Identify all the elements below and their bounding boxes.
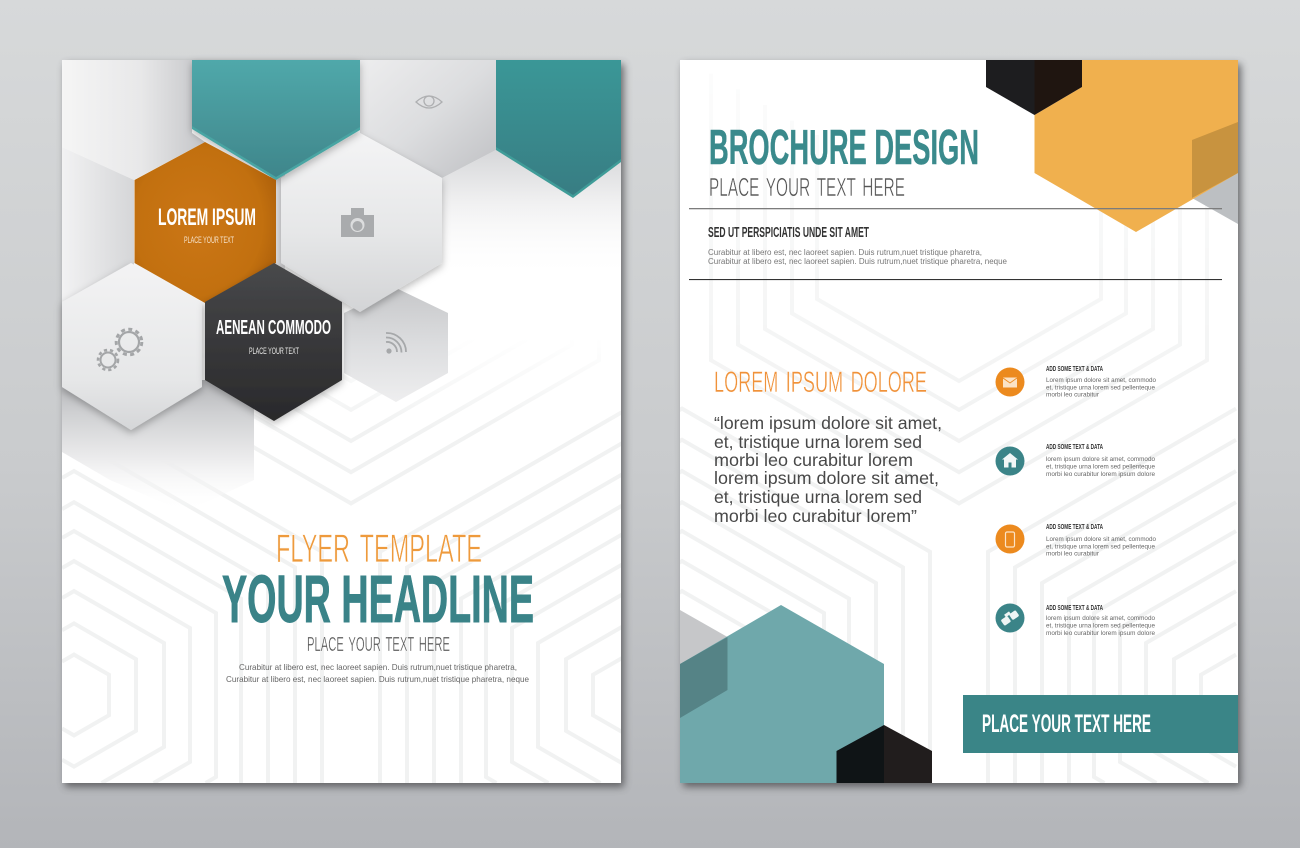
item text: et, tristique urna lorem sed pellenteque <box>1046 544 1155 550</box>
body text <box>226 662 529 684</box>
item text: morbi leo curabitur <box>1046 550 1100 558</box>
quote: “lorem ipsum dolore sit amet, <box>714 413 942 433</box>
icon: gears <box>98 329 142 370</box>
item: mail <box>996 366 1156 398</box>
hexagon: orange top <box>1034 60 1238 232</box>
hexagon: orange <box>134 142 276 303</box>
section heading: SED UT PERSPICIATIS UNDE SIT AMET <box>708 225 869 241</box>
text: place your text: PLACE YOUR TEXT <box>184 235 234 246</box>
hexagon: gears <box>62 263 202 430</box>
hexagon cluster <box>62 60 621 512</box>
heading: lorem ipsum: LOREM IPSUM <box>158 204 256 231</box>
item heading: ADD SOME TEXT & DATA <box>1046 366 1103 373</box>
flyer title: FLYER TEMPLATE <box>276 527 482 571</box>
body text: Curabitur at libero est, nec laoreet sapien. Duis rutrum,nuet tristique pharetra, neque <box>226 674 529 684</box>
hexagon: teal right <box>496 60 621 198</box>
item text: morbi leo curabitur lorem ipsum dolore <box>1046 630 1155 637</box>
item text <box>1046 377 1156 398</box>
icon: eye <box>416 96 442 108</box>
item heading: ADD SOME TEXT & DATA <box>1046 444 1103 451</box>
section text <box>708 248 1008 266</box>
icon: house <box>1002 453 1018 468</box>
body text: Curabitur at libero est, nec laoreet sapien. Duis rutrum,nuet tristique pharetra, <box>239 662 517 672</box>
hexagon: wifi <box>344 288 448 402</box>
panel: flyer page <box>62 60 628 787</box>
item text <box>1046 456 1155 478</box>
quote: morbi leo curabitur lorem <box>714 450 913 470</box>
item: home <box>996 444 1155 478</box>
brochure title: BROCHURE DESIGN <box>709 121 979 175</box>
panel: brochure page <box>670 60 1241 787</box>
icon: envelope <box>1003 378 1017 388</box>
subheading: PLACE YOUR TEXT HERE <box>307 634 450 656</box>
hexagon: black <box>205 263 342 421</box>
item text: Lorem ipsum dolore sit amet, commodo <box>1046 536 1156 543</box>
hexagon: camera <box>281 133 442 312</box>
quote <box>714 413 942 526</box>
headline: YOUR HEADLINE <box>222 562 534 637</box>
item heading: ADD SOME TEXT & DATA <box>1046 524 1103 531</box>
icon: handshake <box>999 608 1019 626</box>
section text: Curabitur at libero est, nec laoreet sapien. Duis rutrum,nuet tristique pharetra, <box>708 248 982 257</box>
heading: aenean commodo: AENEAN COMMODO <box>216 317 331 339</box>
item text: morbi leo curabitur <box>1046 392 1100 398</box>
item text <box>1046 615 1155 637</box>
hexagon: black top <box>986 60 1082 115</box>
quote: morbi leo curabitur lorem” <box>714 506 917 526</box>
hexagons: bottom left <box>680 605 932 783</box>
section text: Curabitur at libero est, nec laoreet sapien. Duis rutrum,nuet tristique pharetra, neque <box>708 257 1008 266</box>
quote: et, tristique urna lorem sed <box>714 432 922 452</box>
icon: camera <box>341 208 374 237</box>
item heading: ADD SOME TEXT & DATA <box>1046 605 1103 612</box>
subheading: PLACE YOUR TEXT HERE <box>709 172 905 202</box>
item text: lorem ipsum dolore sit amet, commodo <box>1046 615 1155 622</box>
banner <box>963 695 1238 753</box>
item text: lorem ipsum dolore sit amet, commodo <box>1046 456 1155 463</box>
item text: et, tristique urna lorem sed pellenteque <box>1046 622 1155 630</box>
icon: wifi <box>386 333 406 354</box>
item: phone <box>996 524 1156 558</box>
banner text: PLACE YOUR TEXT HERE <box>982 710 1151 738</box>
item text: et, tristique urna lorem sed pellenteque <box>1046 464 1155 470</box>
text: place your text: PLACE YOUR TEXT <box>249 346 299 357</box>
quote: lorem ipsum dolore sit amet, <box>714 468 939 488</box>
item text: Lorem ipsum dolore sit amet, commodo <box>1046 377 1156 384</box>
icon: phone <box>1006 532 1014 547</box>
item text <box>1046 536 1156 558</box>
item text: et, tristique urna lorem sed pellenteque <box>1046 384 1155 392</box>
quote heading: LOREM IPSUM DOLORE <box>714 366 927 399</box>
quote: et, tristique urna lorem sed <box>714 487 922 507</box>
item text: morbi leo curabitur lorem ipsum dolore <box>1046 471 1155 478</box>
item: handshake <box>996 604 1155 637</box>
hexagon: teal top <box>192 60 360 180</box>
